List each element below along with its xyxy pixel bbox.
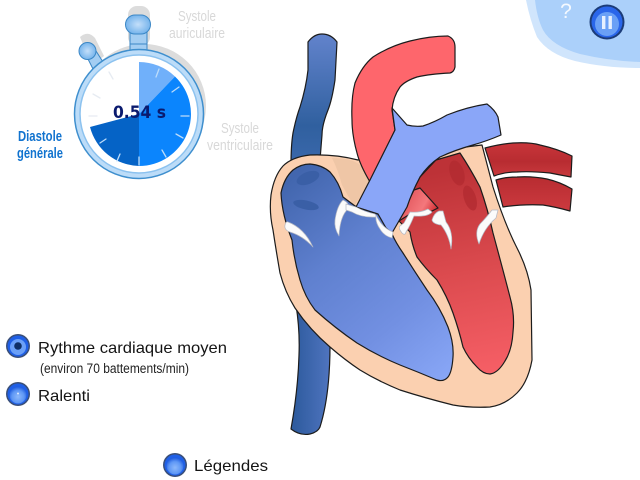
- dial sectors: [90, 62, 191, 166]
- left atrium spots: [446, 158, 480, 212]
- watch case: [74, 50, 204, 178]
- legend toggle: [163, 453, 268, 477]
- label: systole ventriculaire: [207, 120, 273, 154]
- pulmonary vein lower: [496, 177, 572, 211]
- pause button: [590, 4, 624, 40]
- dial ticks on coloured sectors: [100, 69, 189, 165]
- pulmonary artery: [356, 104, 501, 233]
- corner panel outer edge: [526, 0, 640, 68]
- stopwatch: [74, 6, 206, 178]
- elapsed time: 0.54 s: [113, 103, 166, 123]
- tricuspid cusp left: [285, 222, 313, 247]
- dial ticks on white sector: [89, 72, 113, 116]
- pulmonary vein upper: [485, 143, 572, 177]
- superior vena cava: [291, 34, 337, 165]
- option sublabel: (environ 70 battements/min): [40, 361, 189, 376]
- left chambers: [398, 153, 514, 374]
- radio selected: [6, 334, 30, 358]
- label: systole auriculaire: Systole: [178, 8, 216, 25]
- option label: Ralenti: [38, 388, 90, 405]
- aortic valve cusp: [399, 209, 432, 234]
- aorta: [352, 36, 455, 182]
- label: systole ventriculaire: ventriculaire: [207, 137, 273, 154]
- small side button: [79, 42, 103, 69]
- valves: [285, 200, 498, 249]
- top crown button: [126, 15, 150, 50]
- help question mark: ?: [560, 0, 572, 23]
- panel: top-right corner controls: [526, 0, 640, 68]
- stopwatch grey shadow: [80, 6, 206, 168]
- heart diagram: [270, 34, 572, 434]
- legend button: [163, 453, 187, 477]
- option label: Rythme cardiaque moyen: [38, 340, 227, 357]
- sector: systole ventriculaire: [139, 76, 191, 166]
- radio unselected: [6, 382, 30, 406]
- label: diastole générale: [17, 128, 63, 162]
- sector: systole auriculaire: [139, 62, 175, 114]
- heart wall: [270, 145, 532, 407]
- aortic outflow: [399, 188, 438, 221]
- label: systole auriculaire: [169, 8, 225, 42]
- right atrium spots: [292, 168, 321, 212]
- sector: diastole générale: [90, 114, 139, 166]
- label: systole ventriculaire: Systole: [221, 120, 259, 137]
- label: systole auriculaire: auriculaire: [169, 25, 225, 42]
- pulmonary valve cusp lower: [376, 215, 393, 238]
- corner panel fill: [535, 0, 640, 62]
- option: slow motion: [6, 382, 90, 406]
- right chambers: [281, 164, 453, 381]
- tricuspid cusp right: [335, 200, 348, 236]
- pulmonary valve cusp upper: [346, 204, 377, 217]
- label: diastole générale: Diastole: [18, 128, 62, 145]
- legend label: Légendes: [194, 458, 268, 475]
- label: diastole générale: générale: [17, 145, 63, 162]
- mitral cusp right: [477, 210, 498, 244]
- mitral cusp left: [432, 211, 452, 249]
- wall shading: [332, 158, 372, 206]
- inferior vena cava: [291, 305, 330, 434]
- option: average heart rate: [6, 334, 227, 376]
